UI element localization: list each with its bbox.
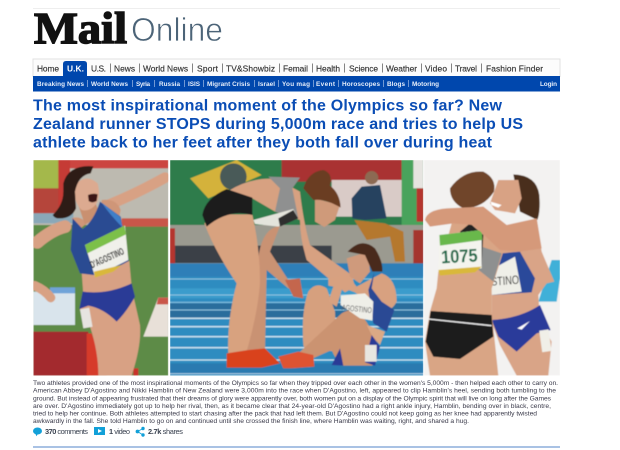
sub navigation bar: Israel	[258, 81, 275, 88]
embracing arms	[425, 207, 542, 252]
neck and head	[79, 204, 98, 225]
D'Agostino body	[491, 248, 555, 376]
navigation bar: Weather	[386, 64, 417, 74]
logo: Mail Online: Mail	[34, 4, 127, 53]
top: Hamblin	[477, 245, 502, 282]
sub navigation bar: ISIS	[188, 81, 201, 88]
shorts: D'Agostino	[332, 335, 380, 366]
active tab: U.K.	[63, 61, 87, 76]
standing runner: Hamblin	[246, 226, 290, 351]
vest	[71, 202, 129, 275]
headline: athlete back to her feet after they both fall over during heat	[33, 135, 493, 152]
Hamblin hair	[450, 172, 494, 208]
photo: Hamblin helps D'Agostino on the track	[170, 160, 423, 376]
photo: runners embrace at the finish: STINO	[491, 273, 519, 289]
caption text	[33, 380, 558, 425]
seated runner: D'Agostino	[303, 285, 337, 355]
logo: Mail Online: Online	[131, 11, 223, 48]
race bib: D'Agostino	[341, 293, 373, 321]
sub navigation bar: Breaking News	[37, 81, 84, 88]
navigation bar: Fashion Finder	[486, 64, 543, 74]
headline	[33, 97, 523, 152]
shorts: Hamblin	[202, 189, 252, 227]
water bottle	[538, 260, 560, 302]
caption text: American Abbey D'Agostino and Nikki Hamblin of New Zealand were 3,000m into the race when D'Agostino, left, appeared to clip Hamblin's heel, sending both tumbling to the	[33, 388, 556, 395]
head: D'Agostino	[347, 252, 370, 283]
vest	[492, 252, 535, 295]
navigation bar: Femail	[283, 64, 308, 74]
headline: The most inspirational moment of the Olympics so far? New	[33, 97, 503, 114]
navigation bar: Sport	[197, 64, 219, 74]
legs and midriff	[80, 261, 140, 376]
caption text: are over. D'Agostino immediately got up to help her rival, then, as it became clear that 24-year-old D'Agostino had a right ankle injury, Hamblin, bending over in black, centre,	[33, 403, 551, 410]
sub navigation bar: Syria	[136, 81, 150, 88]
stat: shares: 2.7k shares	[148, 427, 183, 436]
navigation bar: U.S.	[91, 64, 106, 74]
photo: runners embrace at the finish: 1075	[440, 244, 478, 267]
sub navigation bar: Blogs	[387, 81, 405, 88]
vest: D'Agostino	[368, 272, 394, 332]
race bib	[85, 226, 128, 277]
race bib: Hamblin	[438, 230, 482, 272]
head: Hamblin	[315, 198, 340, 227]
joined hands	[285, 278, 303, 298]
navigation bar	[33, 59, 560, 76]
navigation bar: U.K.	[67, 64, 84, 74]
photo: D'Agostino running: D'AGOSTINO	[89, 246, 126, 271]
stat: videos	[94, 427, 130, 436]
arms	[35, 178, 165, 298]
photo: D'Agostino running	[33, 160, 168, 376]
navigation bar: Science	[349, 64, 378, 74]
photo: Hamblin helps D'Agostino on the track: AGOSTINO	[341, 303, 372, 315]
shorts: D'Agostino	[492, 305, 551, 352]
top: Hamblin	[268, 177, 300, 218]
navigation bar: TV&Showbiz	[226, 64, 275, 74]
sub navigation bar: Login	[540, 81, 557, 88]
navigation bar: Health	[316, 64, 340, 74]
caption text: ground. But instead of appearing frustrated that their dreams of glory were apparently over, both women put on a display of the Olympic spirit that will live on long after the Games	[33, 396, 552, 402]
icon: speech bubble	[33, 428, 42, 436]
navigation bar: Video	[425, 64, 447, 74]
sub navigation bar: Motoring	[412, 81, 439, 88]
sub navigation bar	[33, 76, 560, 92]
spectator	[352, 185, 387, 220]
sub navigation bar: World News	[91, 81, 128, 88]
sub navigation bar: Russia	[159, 81, 180, 88]
photo: runners embrace at the finish	[424, 160, 560, 376]
stat: comments: 370 comments	[45, 427, 88, 436]
sub navigation bar: Event	[316, 81, 336, 88]
icon: share	[136, 427, 144, 436]
shoes: D'Agostino	[278, 352, 314, 368]
caption text: Two athletes provided one of the most inspirational moments of the Olympics so far when they tripped over each other in the women's 5,000m - then helped each other to carry on.	[33, 380, 558, 387]
navigation bar: Home	[37, 64, 59, 74]
sub navigation bar: Horoscopes	[342, 81, 380, 88]
navigation bar: Travel	[455, 64, 477, 74]
race bib: D'Agostino	[491, 257, 522, 295]
navigation bar: World News	[143, 64, 188, 74]
caption text: tried to help her continue. Both athletes attempted to start chasing after the pack that had left them. But D'Agostino could not keep going as her knee had apparently twisted	[33, 410, 537, 418]
shorts	[79, 283, 135, 322]
track lanes	[170, 263, 423, 277]
icon: video	[94, 427, 105, 435]
shoes: Hamblin	[227, 348, 280, 368]
sub navigation bar: Migrant Crisis	[207, 81, 250, 88]
sub navigation bar: You mag	[282, 81, 310, 88]
caption text: awkwardly in the fall. She told Hamblin to go on and continued until she crossed the finish line, where Hamblin was waiting, right, and shared a hug.	[33, 418, 469, 425]
shorts: Hamblin	[426, 311, 493, 359]
logo: Mail Online	[34, 4, 223, 53]
headline: Zealand runner STOPS during 5,000m race and tries to help US	[33, 116, 523, 133]
Hamblin back	[425, 218, 503, 376]
D'Agostino hair and head	[513, 174, 540, 220]
stat: videos: 1 video	[109, 427, 130, 436]
navigation bar: News	[114, 64, 135, 74]
